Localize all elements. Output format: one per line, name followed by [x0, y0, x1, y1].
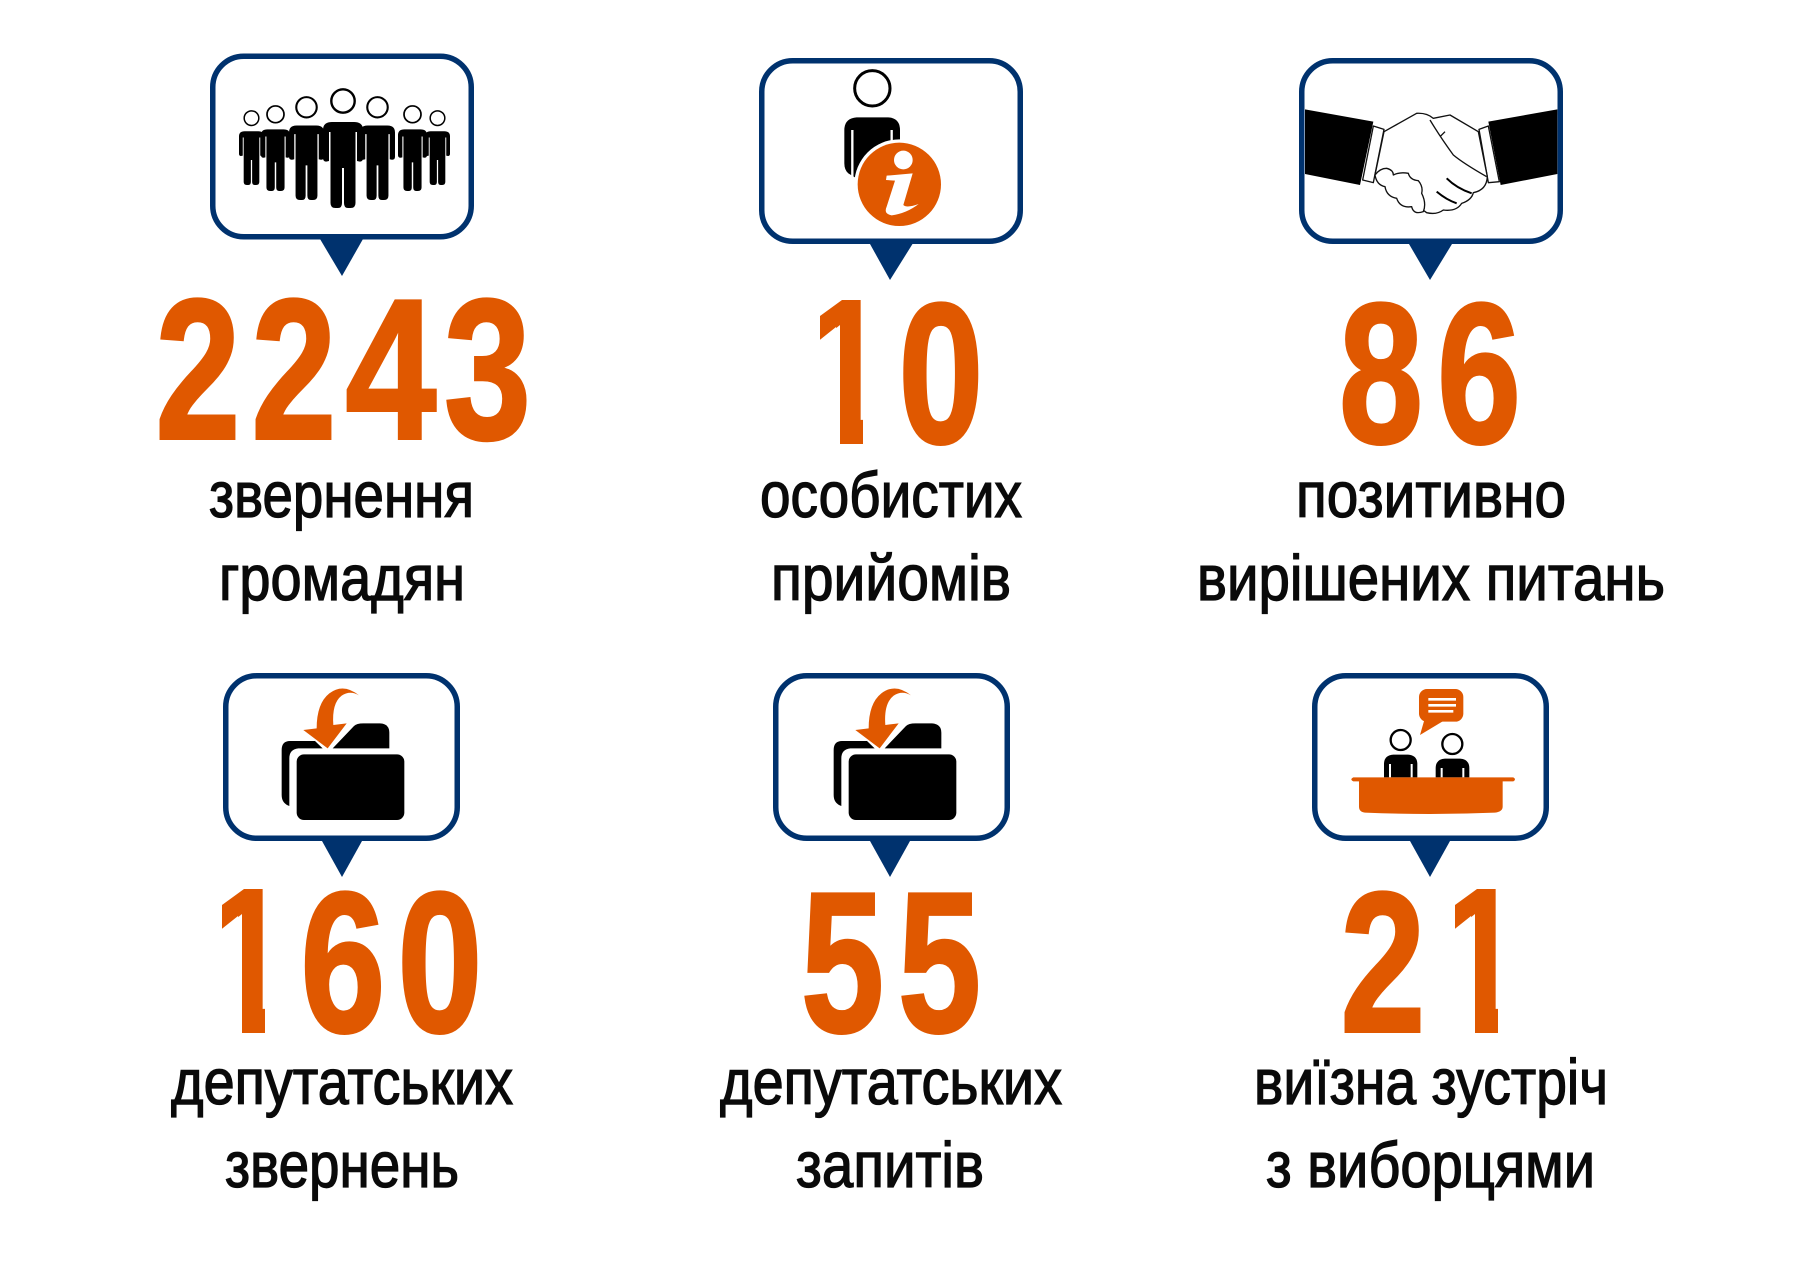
- number: 55: 5: [801, 852, 884, 1074]
- number: 2243: 2: [155, 258, 240, 482]
- number: 10: [800, 256, 983, 486]
- icon: two people at a desk in speech bubble: [1315, 676, 1546, 877]
- panel: positively resolved issues: [1197, 61, 1665, 614]
- label: positively resolved issues: [1197, 459, 1665, 614]
- panel: citizen appeals: [155, 56, 531, 614]
- number: 10: 0: [898, 262, 983, 486]
- number: 160: 0: [397, 852, 482, 1074]
- label: citizen appeals: громадян: [219, 542, 465, 614]
- label: personal receptions: особистих: [760, 459, 1022, 531]
- icon: group of people in speech bubble: [213, 56, 471, 276]
- icon: person with info badge in speech bubble: [762, 61, 1020, 280]
- label: deputy requests: [720, 1046, 1062, 1201]
- number: 86: 6: [1437, 262, 1521, 486]
- icon: folder with arrow in speech bubble: [776, 676, 1007, 877]
- label: field meeting with voters: [1254, 1046, 1608, 1201]
- label: deputy appeals: депутатських: [171, 1046, 513, 1118]
- panel: field meeting with voters: [1254, 676, 1608, 1201]
- label: citizen appeals: [209, 459, 474, 614]
- number: 2243: [155, 258, 531, 482]
- number: 2243: 2: [251, 258, 336, 482]
- panel: deputy requests: [720, 676, 1062, 1201]
- icon: folder with arrow in speech bubble: [226, 676, 457, 877]
- number: 160: 1: [202, 844, 292, 1076]
- label: positively resolved issues: вирішених питань: [1197, 542, 1665, 614]
- number: 2243: 3: [444, 258, 531, 482]
- number: 21: 2: [1340, 852, 1425, 1074]
- label: personal receptions: [760, 459, 1022, 614]
- number: 160: 6: [300, 852, 385, 1074]
- label: field meeting with voters: виїзна зустріч: [1254, 1046, 1608, 1118]
- panel: deputy appeals: [171, 676, 513, 1201]
- label: deputy requests: запитів: [796, 1129, 984, 1201]
- label: field meeting with voters: з виборцями: [1266, 1129, 1595, 1201]
- label: deputy appeals: звернень: [225, 1129, 459, 1201]
- number: 21: [1340, 844, 1528, 1076]
- number: 55: 5: [898, 852, 981, 1074]
- panel: personal receptions: [760, 61, 1022, 614]
- number: 160: [202, 844, 482, 1076]
- label: positively resolved issues: позитивно: [1296, 459, 1566, 531]
- label: personal receptions: прийомів: [771, 542, 1011, 614]
- number: 55: [801, 852, 981, 1074]
- label: deputy appeals: [171, 1046, 513, 1201]
- label: deputy requests: депутатських: [720, 1046, 1062, 1118]
- number: 2243: 4: [345, 258, 436, 482]
- number: 21: 1: [1434, 844, 1524, 1076]
- icon: handshake in speech bubble: [1302, 61, 1560, 280]
- number: 10: 1: [800, 256, 890, 486]
- number: 86: 8: [1339, 262, 1423, 486]
- label: citizen appeals: звернення: [209, 459, 474, 531]
- number: 86: [1339, 262, 1521, 486]
